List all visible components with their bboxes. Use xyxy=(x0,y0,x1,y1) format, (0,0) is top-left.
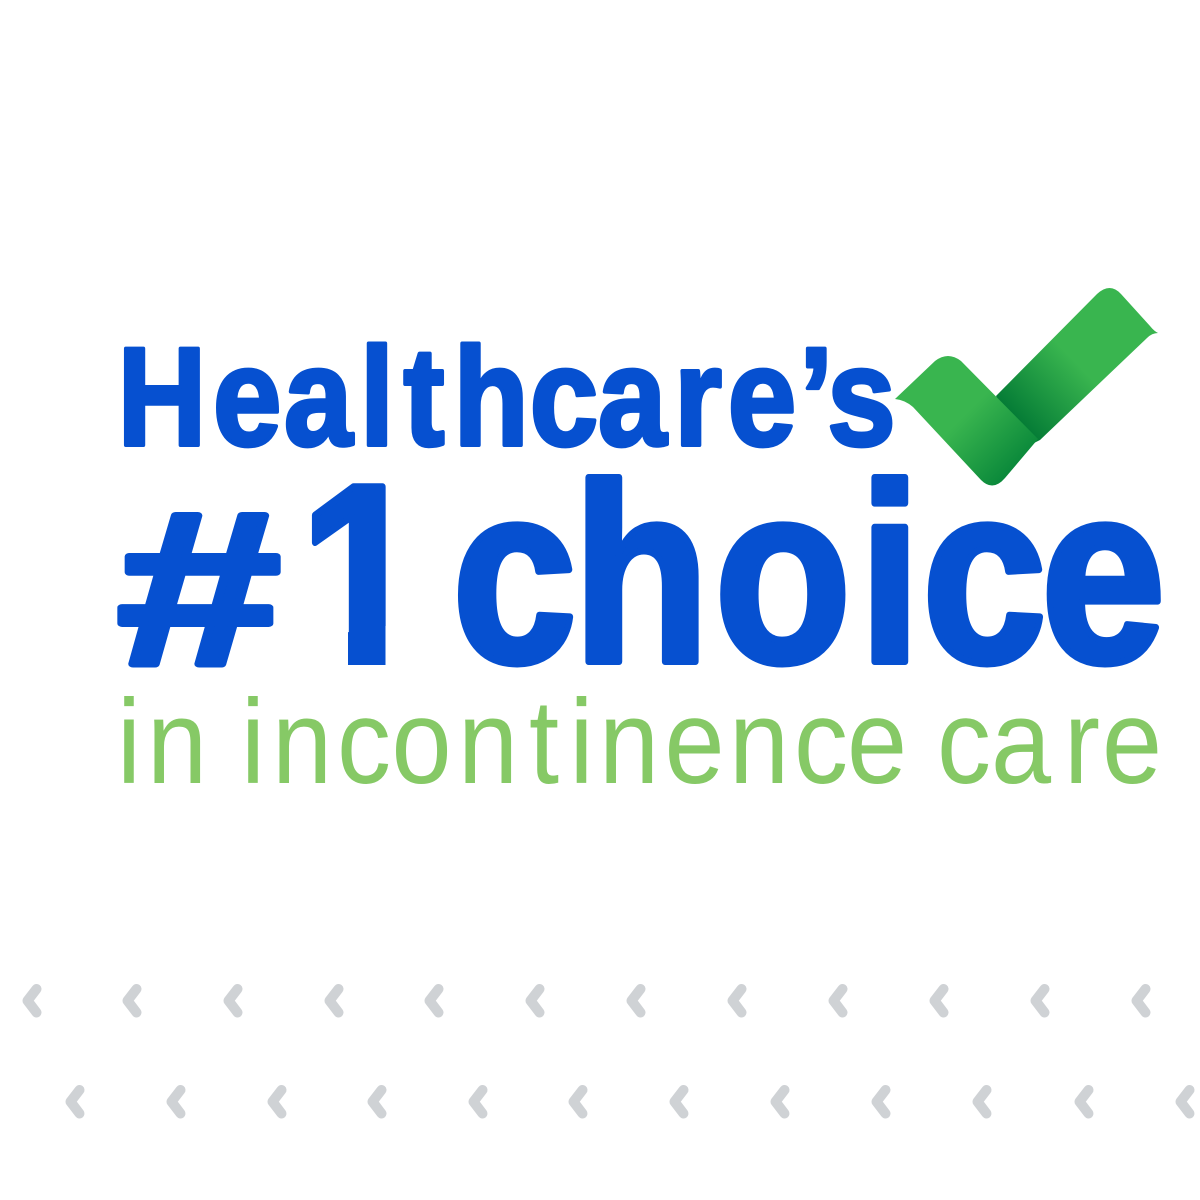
short arm of check mark xyxy=(895,356,1038,486)
chevron pattern: bottom row xyxy=(70,1090,1190,1114)
subheading: in incontinence care: in incontinence care xyxy=(117,676,1162,809)
heading: Healthcare's: Healthcare’s xyxy=(117,319,896,475)
chevron pattern: top row xyxy=(28,989,1146,1012)
heading: 1 choice: 1 choice xyxy=(300,431,1165,716)
icon: green check mark xyxy=(895,288,1158,486)
long arm of check mark xyxy=(996,288,1158,450)
heading: hash symbol: # xyxy=(117,467,281,710)
